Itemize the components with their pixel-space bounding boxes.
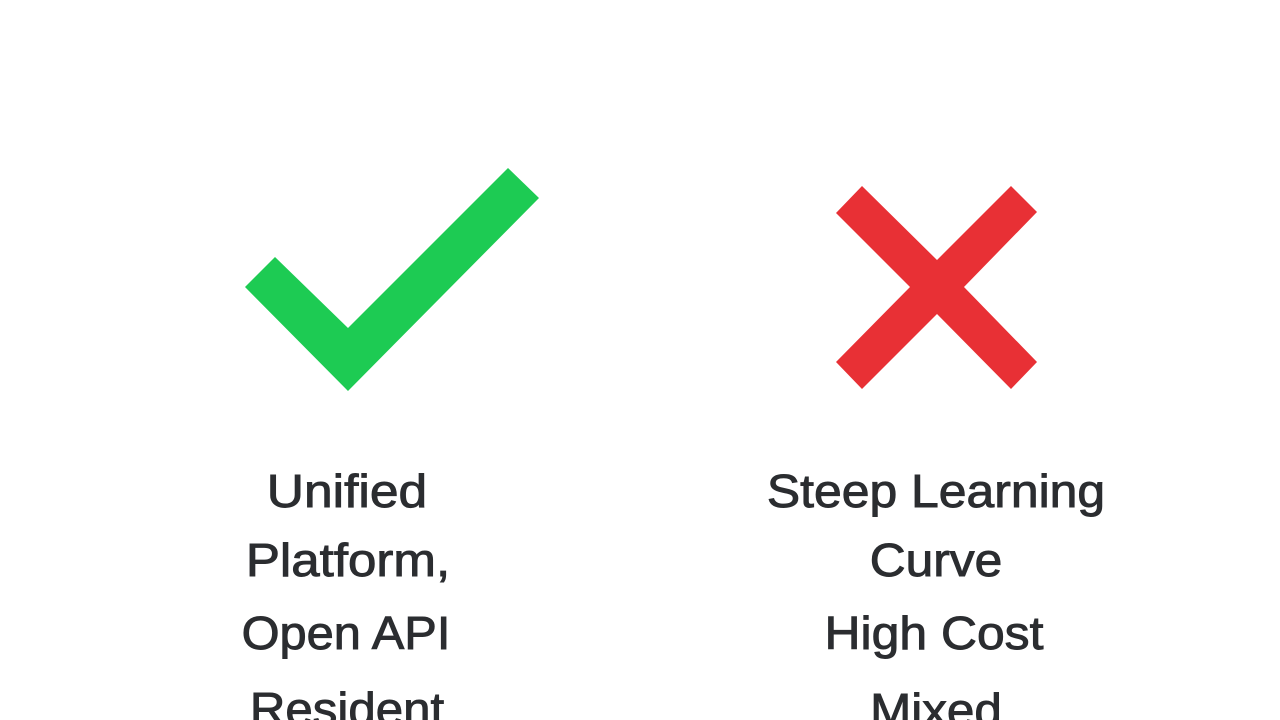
- icon: green check mark: [245, 168, 539, 391]
- pros text list: [241, 465, 450, 720]
- cons text list: [766, 465, 1105, 720]
- con: high cost: High Cost: [824, 607, 1043, 659]
- con: steep learning: Steep Learning: [766, 465, 1105, 517]
- icon: red cross: [836, 186, 1037, 389]
- pro: open api: Open API: [241, 607, 450, 659]
- pro: unified: Unified: [266, 465, 427, 517]
- con: curve: Curve: [870, 534, 1002, 586]
- pro: platform: Platform,: [245, 534, 450, 586]
